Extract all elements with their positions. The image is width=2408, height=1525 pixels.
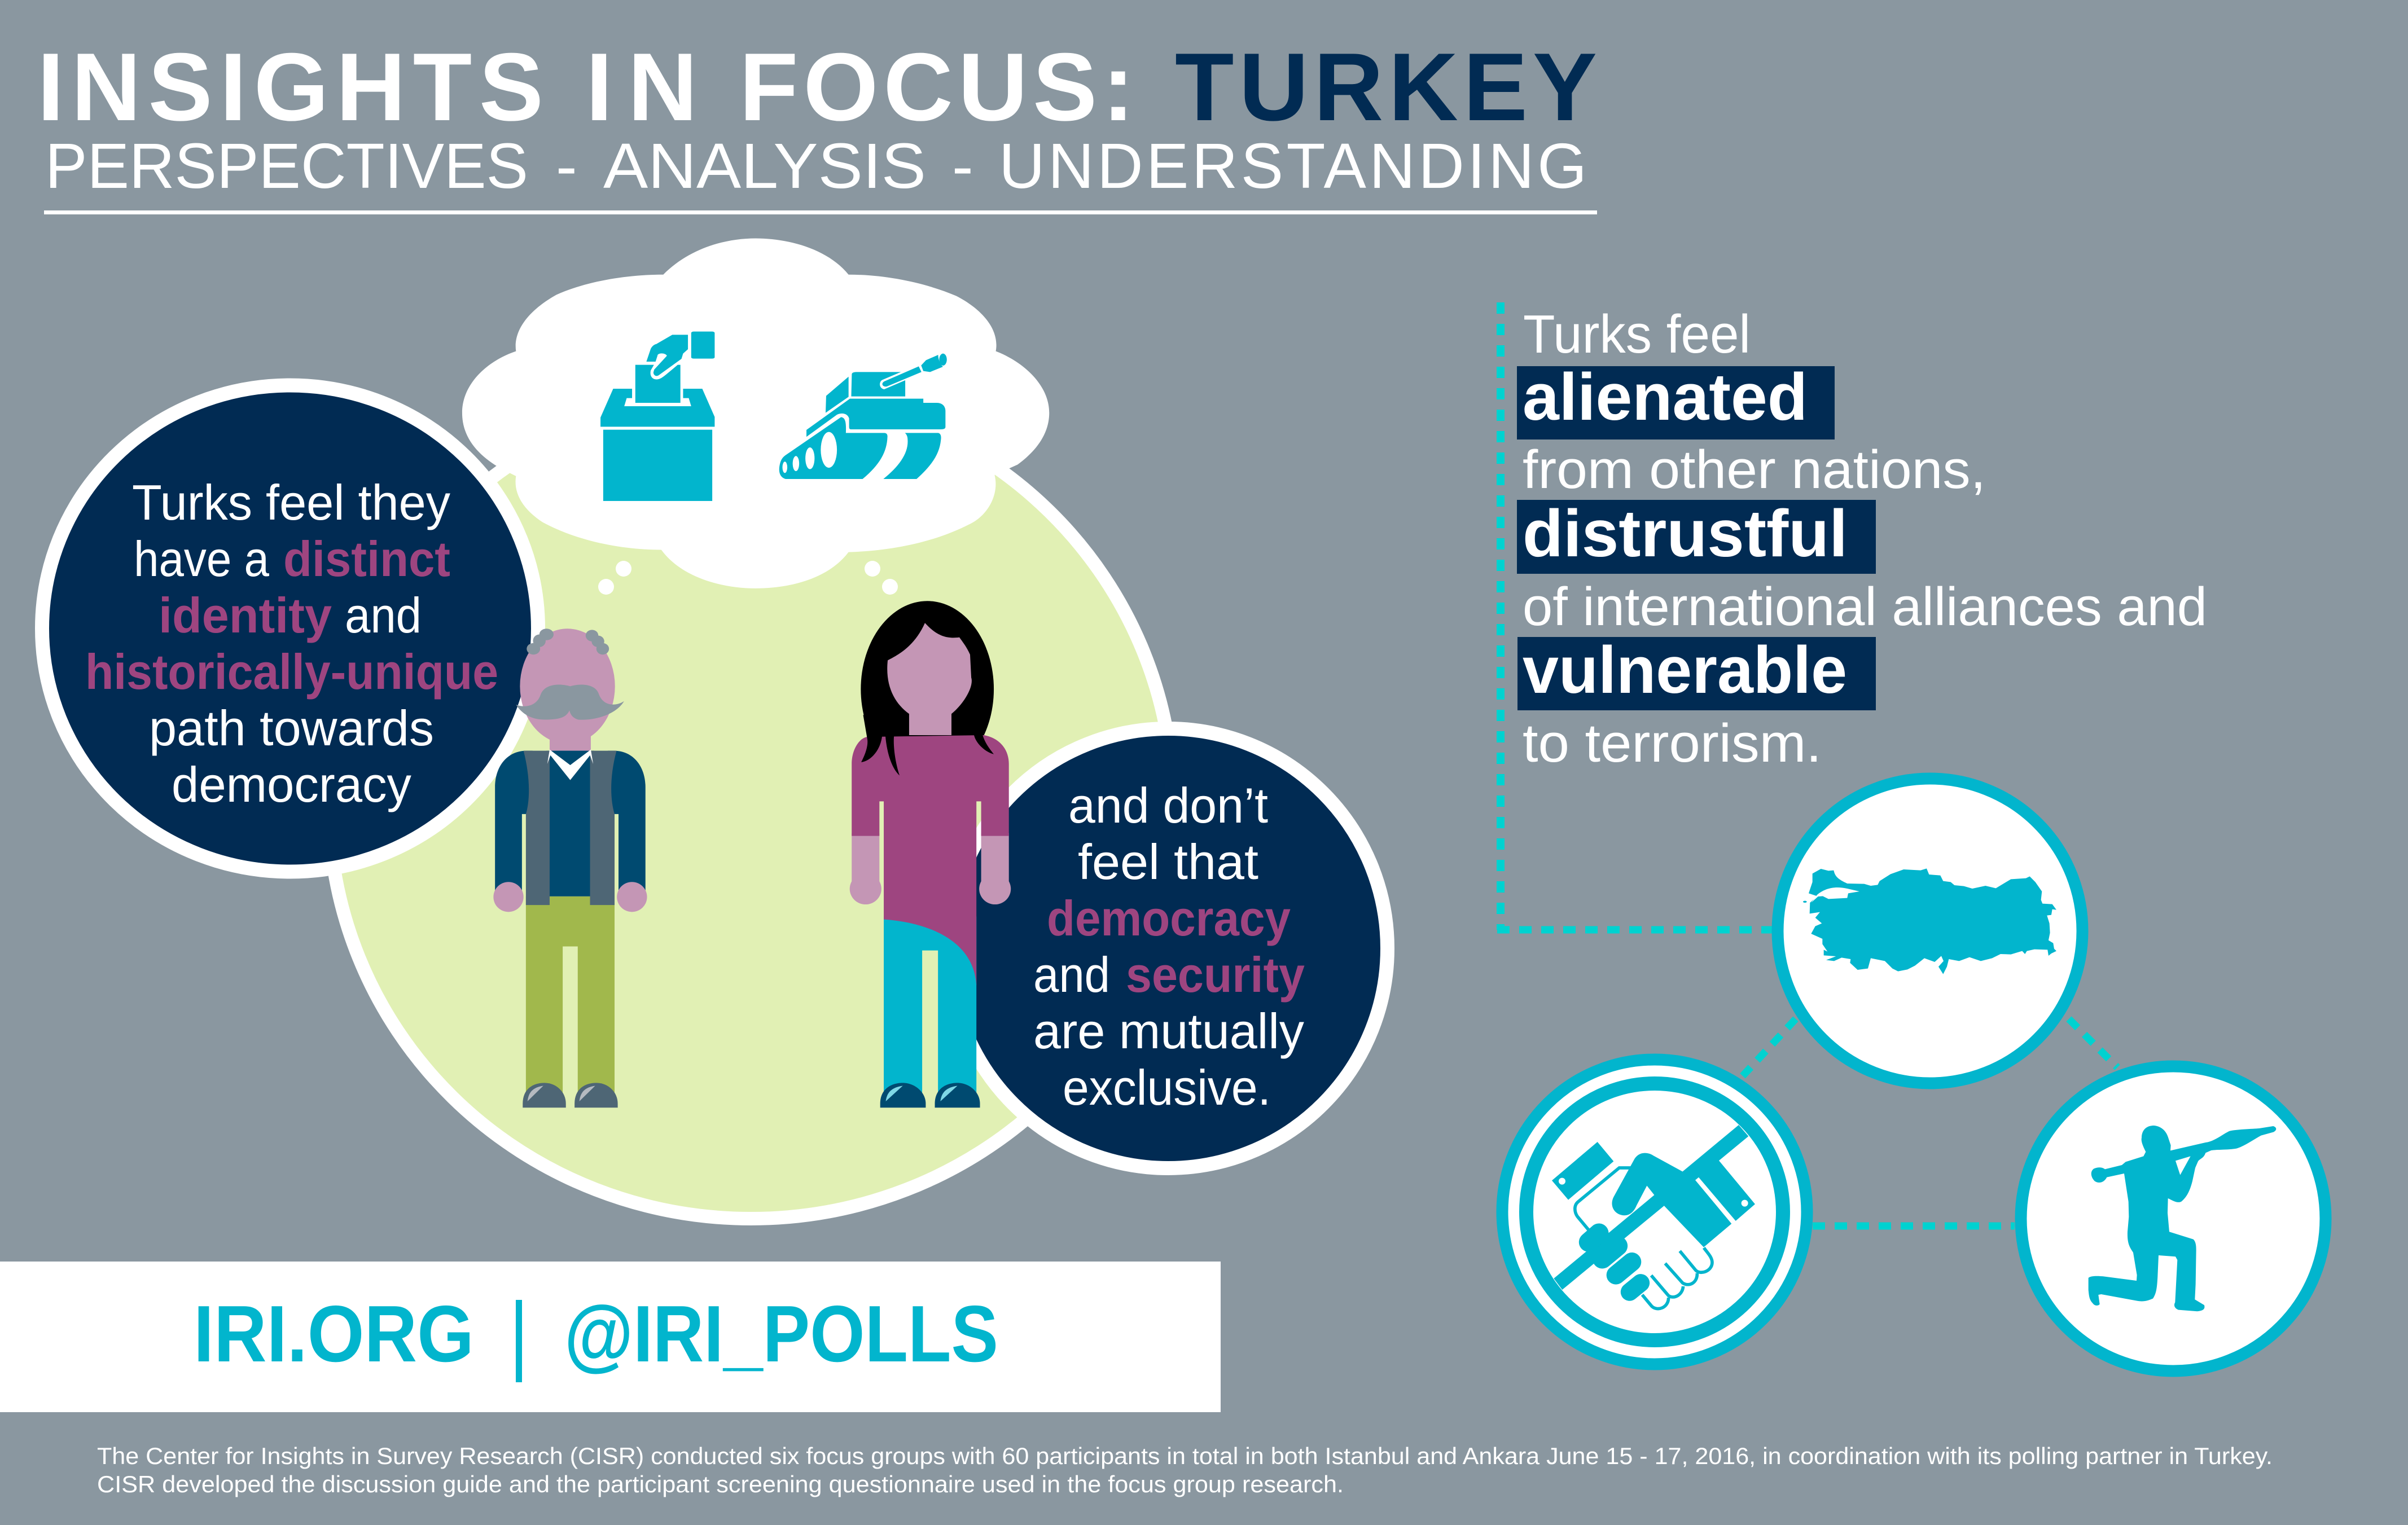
subtitle: - <box>952 130 973 201</box>
footnote: CISR developed the discussion guide and the participant screening questionnaire used in the focus group research. <box>97 1471 1344 1497</box>
line: of international alliances: of international alliances and <box>1523 577 2207 637</box>
left circle text <box>85 474 498 812</box>
circle icon: terrorism <box>2021 1066 2326 1371</box>
man: shirt and jacket <box>495 751 646 896</box>
woman: jeans <box>884 916 976 1098</box>
social handle: @IRI_POLLS <box>564 1289 998 1379</box>
right navy circle: mutually exclusive <box>949 729 1387 1168</box>
right circle text: exclusive. <box>1063 1060 1271 1115</box>
man: shoes <box>523 1083 618 1108</box>
right circle text: and don’t <box>1068 777 1268 833</box>
figure: man <box>493 629 647 1108</box>
right circle text: are mutually <box>1033 1003 1304 1059</box>
line: turks feel: Turks feel <box>1523 304 1751 364</box>
right circle text: feel that <box>1078 834 1258 890</box>
left circle text: have a <box>134 531 269 587</box>
subtitle: UNDERSTANDING <box>999 130 1587 201</box>
woman: forearms and hands <box>850 833 1011 904</box>
subtitle: PERSPECTIVES <box>45 130 528 201</box>
woman: hair strands <box>861 709 994 775</box>
footnote: The Center for Insights in Survey Research (CISR) conducted six focus groups with 60 participants in total in both Istanbul and Ankara June 15 - 17, 2016, in coordination with its polling partner in Turkey. <box>97 1443 2273 1469</box>
circle icon: map of turkey <box>1778 779 2082 1083</box>
left circle text: and <box>345 587 422 643</box>
woman: shoes <box>880 1083 980 1108</box>
left circle text: democracy <box>172 757 411 812</box>
left circle text: historically-unique <box>85 644 498 700</box>
man: vest <box>524 751 617 905</box>
right circle text: democracy <box>1047 890 1291 946</box>
title block <box>37 33 1597 214</box>
title: insights in focus: FOCUS: <box>739 33 1134 141</box>
woman: face and neck <box>887 623 972 735</box>
footnote <box>97 1443 2273 1497</box>
website url: IRI.ORG <box>194 1289 474 1379</box>
highlight: alienated: alienated <box>1523 360 1808 434</box>
icon: tank <box>779 354 947 479</box>
subtitle: - <box>556 130 577 201</box>
man: hair <box>527 629 609 654</box>
man: trousers <box>526 896 615 1098</box>
highlight: distrustful: distrustful <box>1523 496 1848 571</box>
man: hands <box>493 882 647 912</box>
thought cloud <box>462 238 1049 595</box>
right circle text: security <box>1126 947 1305 1003</box>
circle icon: no alliances handshake <box>1502 1060 1807 1364</box>
line: to terrorism: to terrorism. <box>1523 713 1822 774</box>
statement: alienated, distrustful, vulnerable <box>1517 304 2207 774</box>
line: from other nations: from other nations, <box>1523 440 1986 500</box>
man: collar <box>547 750 593 780</box>
left navy circle: distinct identity <box>42 385 538 872</box>
title: insights in focus <box>37 33 1134 141</box>
title: insights in focus: INSIGHTS <box>37 33 543 141</box>
left circle text: path towards <box>149 700 434 756</box>
handshake with slash <box>1552 1125 1755 1309</box>
left circle text: Turks feel they <box>132 474 450 530</box>
kneeling soldier with launcher <box>2089 1126 2276 1311</box>
woman: hair back <box>861 601 994 777</box>
woman: shirt <box>852 735 1009 986</box>
title: insights in focus: IN <box>586 33 698 141</box>
title: turkey: TURKEY <box>1175 33 1597 141</box>
subtitle <box>45 130 1587 201</box>
left circle text: identity <box>159 587 332 643</box>
highlight: vulnerable: vulnerable <box>1523 633 1847 707</box>
right circle text <box>1033 777 1305 1115</box>
man: moustache <box>516 684 624 720</box>
left circle text: distinct <box>283 531 450 587</box>
man: neck and head <box>520 629 615 755</box>
website and social bar <box>0 1262 1221 1412</box>
subtitle: ANALYSIS <box>603 130 926 201</box>
icon: ballot box <box>600 332 714 501</box>
figure: woman <box>850 601 1011 1108</box>
dashed connectors <box>1497 302 2117 1226</box>
green background circle <box>329 390 1173 1219</box>
right circle text: and <box>1033 947 1110 1003</box>
map of turkey <box>1803 868 2056 974</box>
